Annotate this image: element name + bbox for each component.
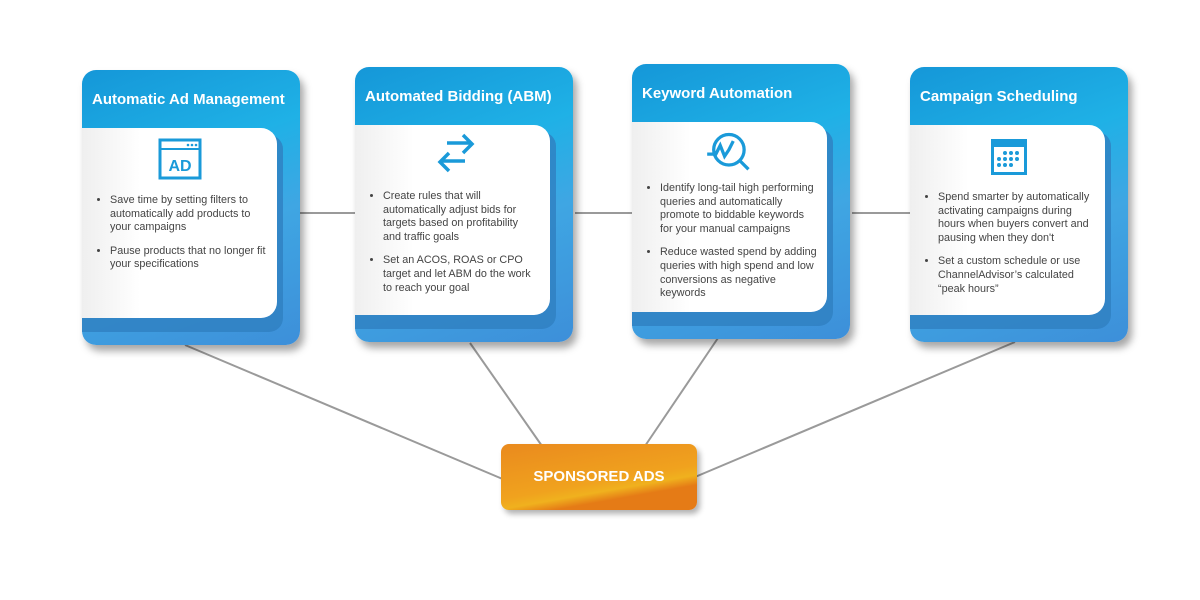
text block: Save time by setting filters to automatically add products to your campaigns [110,194,250,233]
panel: automated bidding [355,67,573,342]
text block: Spend smarter by automatically activating campaigns during hours when buyers convert and pausing when they don't [938,191,1089,244]
text block: Reduce wasted spend by adding queries with high spend and low conversions as negative keywords [660,246,817,299]
icon: AD window: AD [168,158,192,175]
text block [632,122,827,312]
panel: keyword automation [632,64,850,339]
panel: automatic ad management [82,70,300,345]
panel: campaign scheduling [910,67,1128,342]
text block: Identify long-tail high performing queries and automatically promote to biddable keywords for your manual campaigns [660,182,814,235]
callout: sponsored ads: SPONSORED ADS [533,468,665,485]
icon: arrows [438,134,474,172]
text block: Create rules that will automatically adjust bids for targets based on profitability and traffic goals [383,190,518,243]
heading: Automated Bidding (ABM) [365,88,552,105]
text block [82,128,277,318]
icon: AD window [158,138,202,180]
text block: Pause products that no longer fit your specifications [110,245,265,270]
heading: Automatic Ad Management [92,91,285,108]
heading: Keyword Automation [642,85,792,102]
icon: calendar [991,139,1027,175]
text block: Set an ACOS, ROAS or CPO target and let ABM do the work to reach your goal [383,254,531,294]
heading: Campaign Scheduling [920,88,1078,105]
text block: Set a custom schedule or use ChannelAdvisor’s calculated “peak hours” [938,255,1080,295]
callout: sponsored ads [501,444,697,510]
icon: search chart [707,132,750,170]
text block [355,125,550,315]
text block [910,125,1105,315]
